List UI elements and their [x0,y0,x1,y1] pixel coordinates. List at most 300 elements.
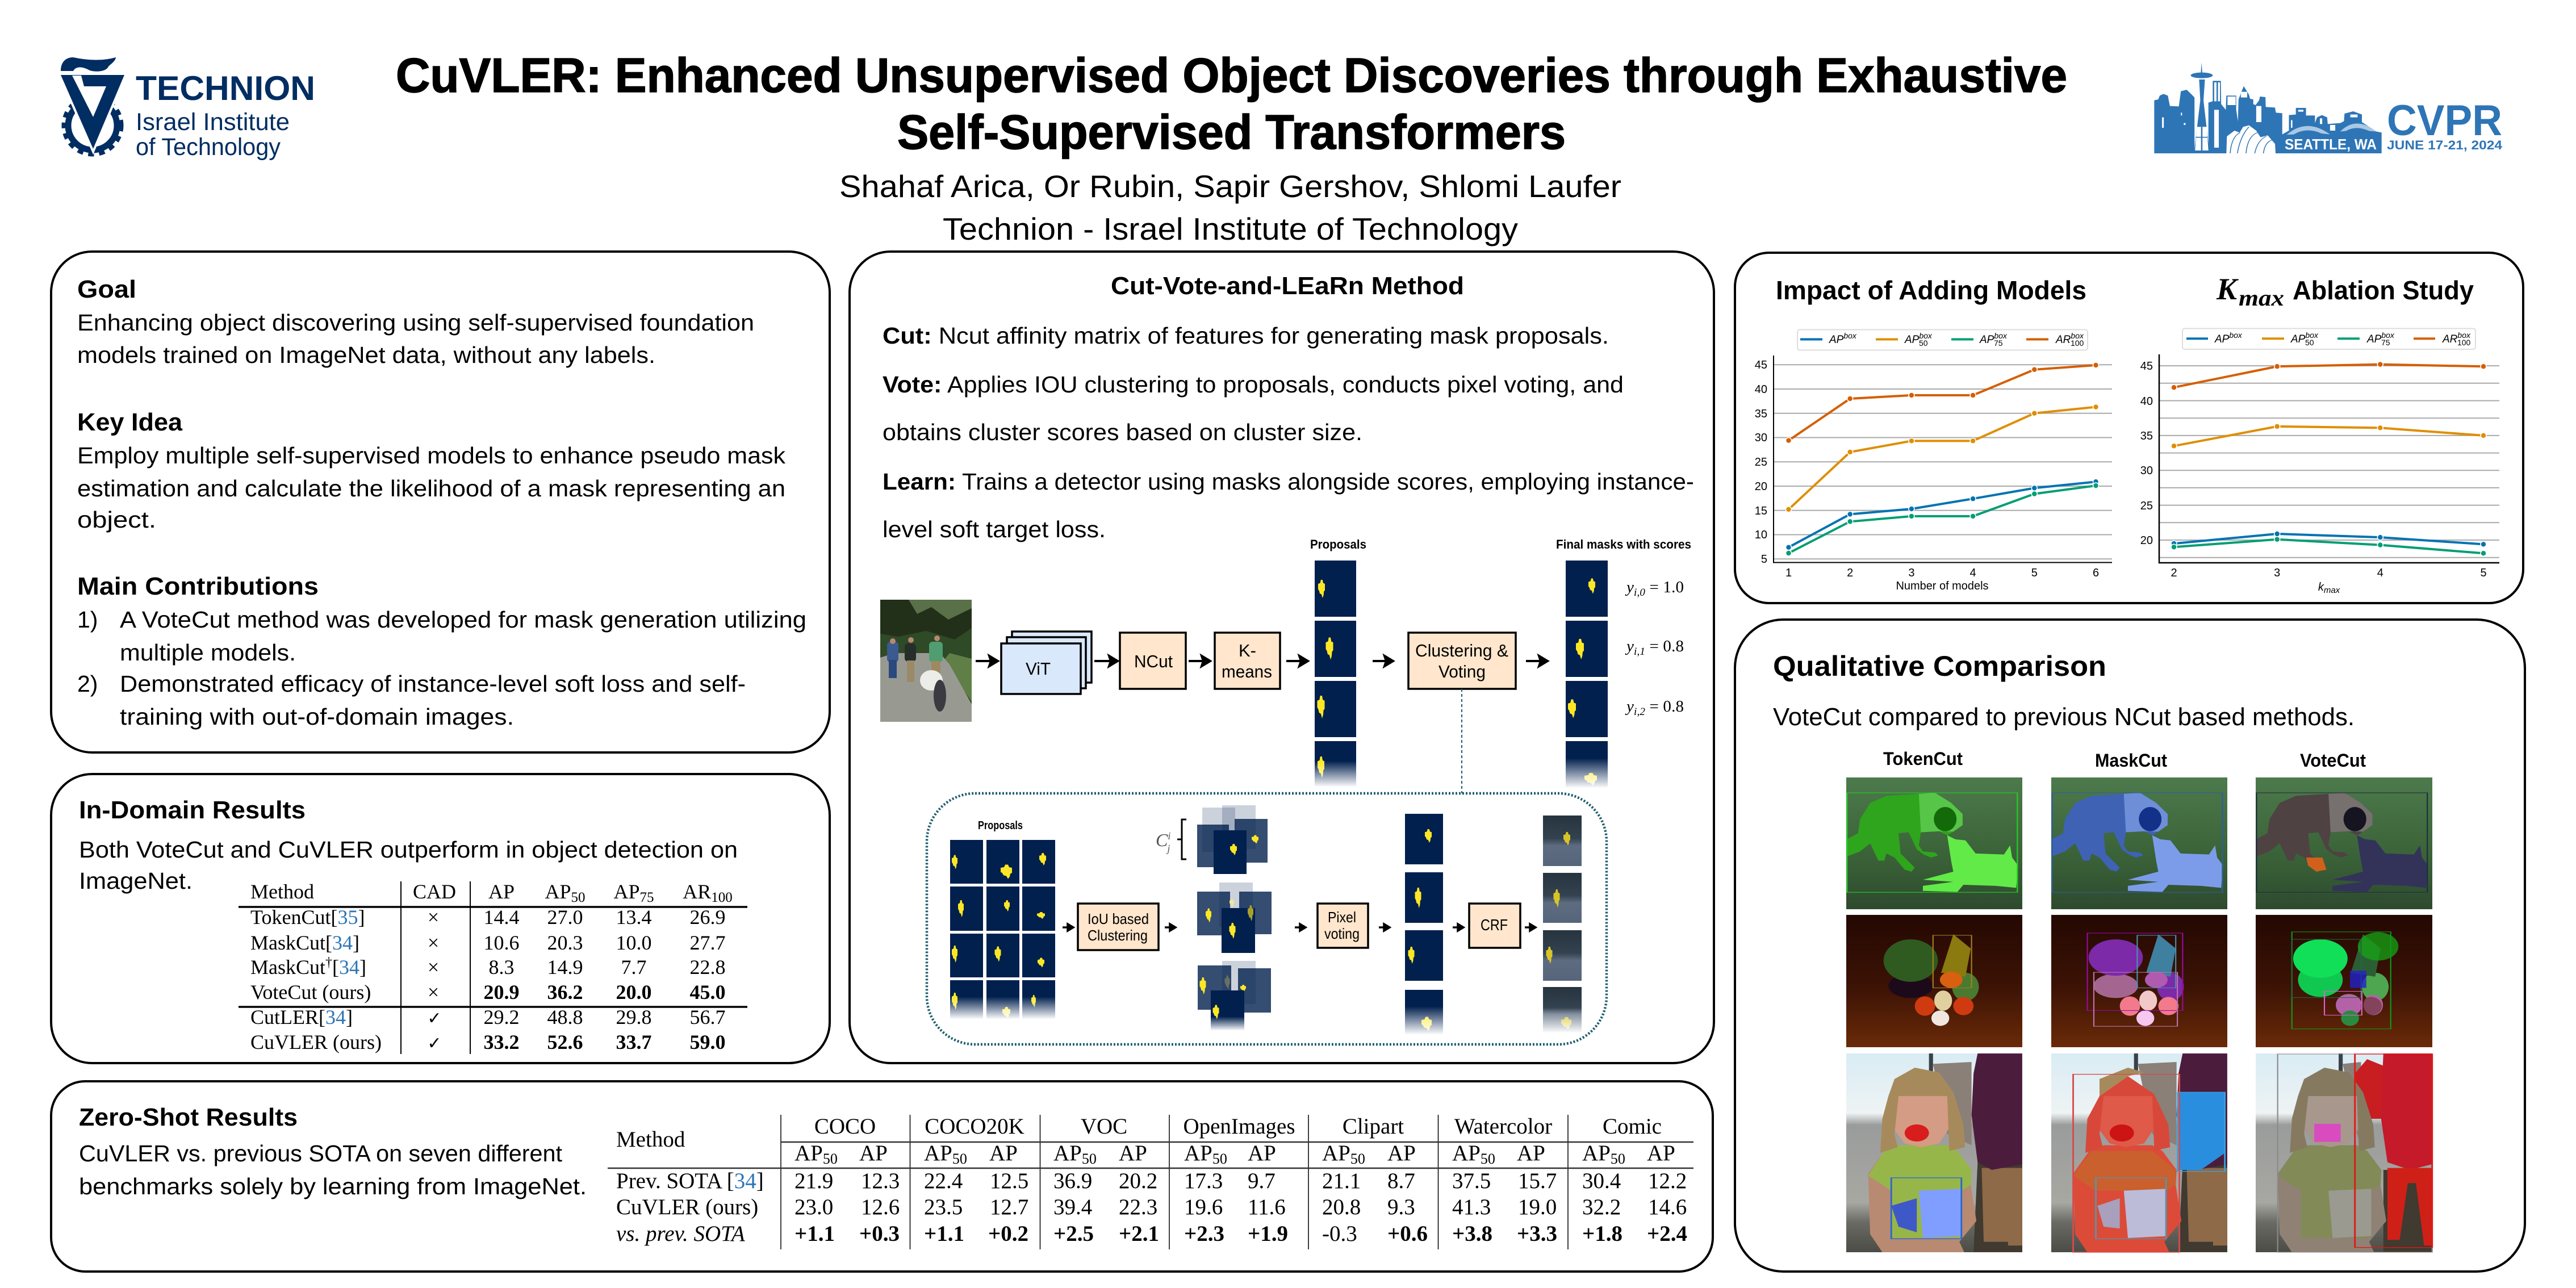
contributions list: Demonstrated efficacy of instance-level soft loss and self- [120,671,746,697]
table: zero-shot: 20.2 [1119,1169,1157,1193]
panel: in-domain results [51,774,830,1063]
y axis labels: 30 [2140,465,2153,477]
table: in-domain: VoteCut (ours) [250,981,371,1003]
legend: 100 [2457,338,2471,347]
table: zero-shot: AP [1184,1141,1212,1165]
heading: qualitative: Qualitative Comparison [1773,650,2106,682]
ViT stacked blocks [1001,632,1092,694]
zero-shot description: benchmarks solely by learning from ImageNet. [79,1173,587,1199]
clustering and voting box [1408,633,1516,689]
contributions list: training with out-of-domain images. [120,704,514,730]
method description: level soft target loss. [883,516,1106,542]
proposals grid [950,840,1055,1019]
final masks label: Final masks with scores [1556,537,1691,551]
legend: AR [2443,333,2457,345]
table: zero-shot: CuVLER (ours) [616,1195,758,1219]
panel: goal, key idea, contributions [51,252,830,752]
panel: Cut-Vote-and-LEaRn method [850,252,1714,1063]
proposals label: Proposals [978,819,1023,832]
arrow [1295,924,1306,931]
heading: kmax ablation: max [2239,285,2284,311]
authors: Shahaf Arica, Or Rubin, Sapir Gershov, Shlomi Laufer [839,169,1621,204]
y axis labels: 25 [2140,500,2153,512]
bracket [1177,819,1186,859]
heading: key idea: Key Idea [77,408,183,436]
legend: box [1919,331,1933,340]
connector to detail panel [1461,689,1462,793]
K-means box: K- [1239,641,1256,660]
table: zero-shot: 20.8 [1322,1195,1361,1219]
arrow [1189,656,1210,666]
x axis labels: 2 [2171,567,2177,579]
x axis labels [2171,567,2487,579]
goal text: Enhancing object discovering using self-supervised foundation [77,310,754,336]
contributions list: 1) [77,607,98,633]
logo: Technion [61,57,315,161]
image: girl VoteCut [2256,1053,2432,1252]
heading: kmax ablation: Ablation Study [2293,275,2474,305]
table: zero-shot: 30.4 [1582,1169,1621,1193]
table: in-domain: ✓ [427,1034,442,1053]
pixel voting box: Pixel [1328,909,1356,926]
table: zero-shot: +1.9 [1248,1222,1288,1246]
table: zero-shot: 22.3 [1119,1195,1157,1219]
table: zero-shot: Comic [1603,1114,1662,1139]
table: in-domain: 14.4 [484,906,519,929]
table: in-domain: 27.0 [547,906,583,929]
series markers [2171,362,2486,556]
cluster 3 [1198,961,1271,1031]
table: in-domain: AP [545,880,571,903]
legend: box [2381,331,2395,340]
table: zero-shot: +0.2 [988,1222,1028,1246]
image: dogs VoteCut [2256,777,2432,909]
logo: CVPR Seattle [2154,62,2503,153]
NCut box [1120,633,1186,689]
table: in-domain: 75 [640,890,654,905]
table: in-domain: CAD [413,880,456,903]
table: zero-shot: AP [1322,1141,1350,1165]
table: in-domain: 48.8 [547,1006,583,1028]
arrow [1094,656,1118,666]
table: in-domain: 50 [571,890,586,905]
zero-shot description [79,1140,587,1199]
table: zero-shot: AP [989,1141,1018,1165]
table: zero-shot: 22.4 [924,1169,963,1193]
table: in-domain: 52.6 [547,1031,583,1053]
pixel voting box [1318,904,1368,948]
method description: Cut: Ncut affinity matrix of features for generating mask proposals. [883,323,1609,349]
table: zero-shot: +3.8 [1452,1222,1492,1246]
voted masks column [1405,814,1443,1035]
score labels: i,1 [1634,646,1645,658]
wordmark line 2: Israel Institute [136,108,290,136]
image: girl MaskCut [2051,1053,2227,1252]
table: zero-shot: 21.1 [1322,1169,1361,1193]
table: in-domain: ✓ [427,1009,442,1028]
score labels: = 1.0 [1645,578,1684,596]
table: zero-shot: AP [1647,1141,1675,1165]
table: in-domain: AP [613,880,640,903]
chart: kmax [2140,328,2499,595]
arrow [1453,924,1463,931]
table: zero-shot: +0.6 [1387,1222,1428,1246]
table: in-domain: 45.0 [689,981,726,1003]
table: zero-shot: COCO [814,1114,876,1139]
y axis labels: 45 [1755,359,1767,371]
series lines [1789,365,2096,553]
table: zero-shot: 50 [1481,1151,1495,1167]
contributions list [77,607,806,730]
table: in-domain: AP [488,880,515,903]
proposals column [1315,561,1356,787]
table: zero-shot: 15.7 [1518,1169,1557,1193]
column label: VoteCut: VoteCut [2300,750,2366,771]
table: zero-shot: OpenImages [1183,1114,1295,1139]
heading: goal: Goal [77,275,136,303]
date: JUNE 17-21, 2024 [2387,138,2503,152]
legend: 75 [1994,338,2003,348]
table: in-domain: [ [332,956,339,978]
arrow [976,656,998,666]
table: zero-shot: 9.3 [1387,1195,1415,1219]
score labels: y [1626,697,1634,716]
x axis labels: 1 [1785,567,1792,579]
arrow [1525,924,1536,931]
y axis labels: 10 [1755,529,1767,541]
series markers [1785,362,2099,556]
table: in-domain: × [428,981,439,1003]
legend: AP [2291,333,2305,345]
zero-shot description: CuVLER vs. previous SOTA on seven different [79,1140,563,1166]
method description [883,323,1694,542]
score labels: i,0 [1634,587,1645,599]
table: zero-shot: 50 [1350,1151,1365,1167]
y axis labels: 20 [2140,534,2153,547]
panel: zero-shot results [51,1081,1713,1272]
x axis labels: 3 [2274,567,2280,579]
y axis labels: 25 [1755,456,1767,469]
contributions list: 2) [77,671,98,697]
y axis labels: 5 [1761,553,1767,566]
legend: AP [2215,333,2229,345]
table: zero-shot: AP [1248,1141,1276,1165]
image: vegetables VoteCut [2256,915,2432,1047]
table: in-domain: 22.8 [689,956,726,978]
table: zero-shot: 23.5 [924,1195,963,1219]
table: zero-shot: +1.1 [794,1222,835,1246]
table: in-domain: 10.0 [616,931,652,954]
method description: Learn: Trains a detector using masks alongside scores, employing instance- [883,469,1694,495]
legend [1797,329,2088,350]
table: in-domain: † [325,955,332,970]
y axis labels: 35 [1755,408,1767,420]
table: in-domain: 20.3 [547,931,583,954]
legend: box [1843,331,1857,340]
heading: method: Cut-Vote-and-LEaRn Method [1111,272,1464,300]
legend: box [2229,331,2243,340]
series lines [2174,365,2483,553]
table: in-domain: 34] [339,956,366,978]
legend: 75 [2381,338,2390,347]
cluster label C: C [1156,830,1168,850]
table: zero-shot: 12.2 [1648,1169,1687,1193]
column label: MaskCut: MaskCut [2095,750,2167,771]
score labels: i,2 [1634,706,1645,718]
table: zero-shot: 19.6 [1184,1195,1223,1219]
method description: obtains cluster scores based on cluster size. [883,419,1362,445]
table: zero-shot [608,1114,1693,1249]
table: zero-shot: AP [924,1141,952,1165]
wordmark line 3: of Technology [136,133,281,161]
arrow [1063,924,1073,931]
panel: charts [1735,253,2523,603]
key idea text: estimation and calculate the likelihood of a mask representing an [77,475,785,501]
table: zero-shot: 11.6 [1248,1195,1286,1219]
key idea text: Employ multiple self-supervised models to enhance pseudo mask [77,442,786,469]
table: in-domain: 33.2 [484,1031,519,1053]
x axis labels: 5 [2031,567,2038,579]
table: zero-shot: 12.5 [990,1169,1028,1193]
table: zero-shot: +2.5 [1053,1222,1094,1246]
affiliation: Technion - Israel Institute of Technology [943,211,1519,246]
title: CuVLER: Enhanced Unsupervised Object Discoveries through Exhaustive [396,49,2067,103]
table: in-domain: Method [250,880,314,903]
image: dogs MaskCut [2051,777,2227,909]
refined results column [1543,816,1582,1033]
table: in-domain: × [428,956,439,978]
pixel voting box: voting [1324,925,1360,942]
score labels: = 0.8 [1645,637,1684,655]
y axis labels: 15 [1755,505,1767,517]
table: in-domain: 26.9 [689,906,726,929]
table: zero-shot: -0.3 [1322,1222,1357,1246]
table: zero-shot: +2.1 [1119,1222,1159,1246]
clustering and voting box: Clustering & [1415,641,1508,660]
key idea text: object. [77,507,156,533]
table: zero-shot: 23.0 [794,1195,833,1219]
table: zero-shot: 36.9 [1053,1169,1092,1193]
diagram: pipeline [880,537,1691,1044]
table: zero-shot: 37.5 [1452,1169,1491,1193]
in-domain description: Both VoteCut and CuVLER outperform in object detection on [79,837,738,863]
table: zero-shot: 12.7 [990,1195,1028,1219]
table: zero-shot: AP [794,1141,823,1165]
score labels: = 0.8 [1645,697,1684,716]
table: zero-shot: 8.7 [1387,1169,1415,1193]
heading: in-domain: In-Domain Results [79,796,306,824]
table: zero-shot: 32.2 [1582,1195,1621,1219]
final masks column [1566,561,1608,788]
heading: zero-shot: Zero-Shot Results [79,1103,298,1131]
CRF box [1469,904,1520,948]
table: zero-shot: AP [1119,1141,1147,1165]
score labels: y [1626,637,1634,655]
table: in-domain: 27.7 [689,931,726,954]
table: zero-shot: COCO20K [925,1114,1024,1139]
legend: 100 [2071,338,2084,348]
panel: qualitative comparison [1735,620,2525,1272]
arrow [1526,656,1548,666]
table: in-domain: 10.6 [484,931,519,954]
legend: AP [1905,334,1919,346]
cluster label C: i [1168,830,1170,842]
table: in-domain: CuVLER (ours) [250,1031,382,1053]
x axis labels: 6 [2093,567,2099,579]
table: in-domain: × [428,931,439,954]
table: zero-shot: +3.3 [1517,1222,1557,1246]
score labels [1625,578,1684,718]
table: zero-shot: +2.3 [1184,1222,1224,1246]
clustering and voting box: Voting [1438,662,1486,681]
image: vegetables TokenCut [1846,915,2022,1047]
icon: Technion gear emblem [61,57,124,154]
x axis labels [1785,567,2099,579]
heading: impact of adding models: Impact of Adding Models [1776,275,2086,305]
table: zero-shot: AP [1053,1141,1082,1165]
in-domain description: ImageNet. [79,868,193,894]
title: Self-Supervised Transformers [897,106,1566,160]
table: in-domain: AR [683,880,711,903]
table: zero-shot: Watercolor [1454,1114,1552,1139]
IoU clustering box: Clustering [1088,927,1148,944]
table: in-domain: TokenCut[35] [250,906,365,929]
table: zero-shot: 12.6 [861,1195,900,1219]
legend: 50 [2305,338,2314,347]
table: in-domain: MaskCut [250,956,325,978]
y axis labels: 30 [1755,432,1767,444]
key idea text [77,442,786,533]
table: zero-shot: 14.6 [1648,1195,1687,1219]
contributions list: multiple models. [120,639,296,666]
legend: box [2305,331,2319,340]
ViT stacked blocks: ViT [1026,659,1051,679]
table: in-domain: 100 [711,890,733,905]
x axis labels: 5 [2480,567,2487,579]
table: zero-shot: +2.4 [1647,1222,1687,1246]
legend: AR [2056,334,2071,346]
chart: number of models [1755,329,2112,592]
CRF box: CRF [1481,916,1508,934]
IoU clustering box [1078,904,1159,950]
table: zero-shot: Method [616,1127,685,1152]
arrow [1165,924,1176,931]
table: zero-shot: Prev. SOTA [34] [616,1169,764,1193]
cluster 2 [1197,883,1272,953]
legend: box [1994,331,2008,340]
table: in-domain: 7.7 [621,956,646,978]
table: in-domain: 59.0 [689,1031,726,1053]
y axis labels [2140,360,2153,547]
table: zero-shot: 21.9 [794,1169,833,1193]
x axis labels: 4 [2377,567,2383,579]
table: zero-shot: 50 [1611,1151,1625,1167]
x axis labels: 3 [1908,567,1914,579]
arrow [1286,656,1308,666]
table: zero-shot: AP [1582,1141,1611,1165]
y axis labels: 35 [2140,430,2153,442]
x axis title: Number of models [1896,580,1989,592]
arrow [1379,924,1390,931]
K-means box: means [1222,662,1272,681]
table: zero-shot: +1.8 [1582,1222,1622,1246]
title [396,49,2067,160]
table: zero-shot: Clipart [1343,1114,1404,1139]
table: zero-shot: 50 [952,1151,967,1167]
goal text: models trained on ImageNet data, without any labels. [77,342,655,368]
table: in-domain: 13.4 [616,906,652,929]
legend [2182,328,2475,349]
legend: AP [2367,333,2381,345]
x axis title: max [2324,586,2340,595]
table: zero-shot: vs. prev. SOTA [616,1222,745,1246]
table: zero-shot: 50 [1212,1151,1227,1167]
table: zero-shot: 19.0 [1518,1195,1557,1219]
legend: box [2457,331,2471,340]
in-domain description [79,837,738,894]
column label: TokenCut: TokenCut [1883,748,1963,769]
table: in-domain: × [428,906,439,929]
table: in-domain: 56.7 [689,1006,726,1028]
proposals label: Proposals [1310,537,1366,551]
table: in-domain: 20.9 [484,981,519,1003]
cluster 1 [1197,805,1268,874]
table: in-domain: 29.2 [484,1006,519,1028]
wordmark: TECHNION [136,69,315,107]
goal text [77,310,754,368]
K-means box [1215,633,1280,689]
legend: AP [1829,334,1843,346]
table: in-domain: MaskCut[34] [250,931,359,954]
skyline [2154,62,2382,153]
table: zero-shot: 17.3 [1184,1169,1223,1193]
table: in-domain: 36.2 [547,981,583,1003]
table: zero-shot: +1.1 [924,1222,964,1246]
score labels: y [1626,578,1634,596]
heading: kmax ablation: K [2216,272,2239,306]
table: zero-shot: 12.3 [861,1169,900,1193]
table: in-domain: 20.0 [616,981,652,1003]
table: in-domain: 14.9 [547,956,583,978]
table: zero-shot: 9.7 [1248,1169,1276,1193]
heading: main contributions: Main Contributions [77,572,319,600]
table: zero-shot: 41.3 [1452,1195,1491,1219]
table: in-domain: 33.7 [616,1031,652,1053]
contributions list: A VoteCut method was developed for mask generation utilizing [120,607,806,633]
heading: kmax ablation [2216,272,2474,311]
detail panel: clustering and voting [927,793,1607,1044]
table: zero-shot: +0.3 [859,1222,900,1246]
x axis title: k [2318,581,2324,593]
SEATTLE label: SEATTLE, WA [2285,136,2377,153]
table: zero-shot: AP [1517,1141,1545,1165]
image: vegetables MaskCut [2051,915,2227,1047]
table: zero-shot: AP [1387,1141,1416,1165]
y axis labels: 20 [1755,480,1767,493]
method description: Vote: Applies IOU clustering to proposals, conducts pixel voting, and [883,371,1624,398]
table: zero-shot: 50 [823,1151,838,1167]
table: zero-shot: AP [859,1141,888,1165]
legend: 50 [1919,338,1928,348]
table: zero-shot: AP [1452,1141,1481,1165]
x axis labels: 2 [1847,567,1853,579]
arrow [1373,656,1393,666]
IoU clustering box: IoU based [1088,910,1149,927]
table: zero-shot: 50 [1082,1151,1097,1167]
table: in-domain: 29.8 [616,1006,652,1028]
y axis labels: 40 [2140,395,2153,408]
y axis labels [1755,359,1767,566]
